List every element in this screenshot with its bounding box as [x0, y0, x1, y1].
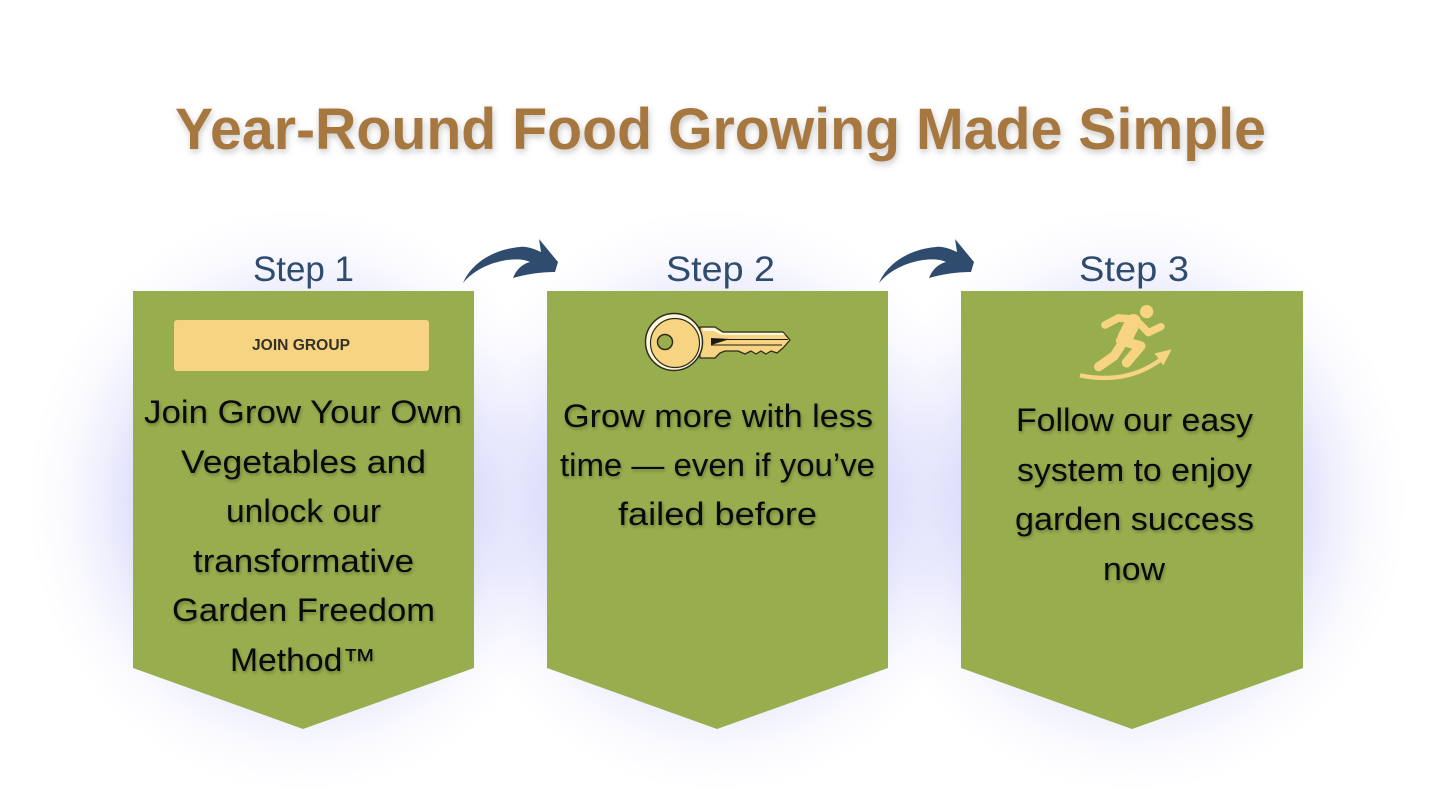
- step 2 description: [560, 398, 875, 532]
- title: Year-Round Food Growing Made Simple: [175, 97, 1266, 162]
- step 2 pentagon background: [547, 291, 888, 729]
- step 3 heading: Step 3: [1079, 250, 1189, 289]
- step 3 description: Follow our easy: [1016, 402, 1253, 438]
- arrow: step 1 to step 2: [463, 239, 558, 283]
- step 1 description: Garden Freedom: [172, 592, 435, 628]
- join group button: [174, 320, 429, 371]
- panel: step 3: [961, 250, 1303, 729]
- step 1 description: Join Grow Your Own: [144, 394, 462, 430]
- step 3 description: [1015, 402, 1254, 587]
- panel: step 1: [133, 250, 474, 729]
- step 3 description: now: [1103, 551, 1166, 587]
- step 3 description: garden success: [1015, 501, 1254, 537]
- step 1 pentagon background: [133, 291, 474, 729]
- arrow: step 2 to step 3: [879, 239, 974, 283]
- background glow behind panels: [28, 208, 1407, 792]
- join group button: JOIN GROUP: [252, 337, 350, 354]
- icon: runner with rising arrow: [1080, 305, 1172, 378]
- step 1 description: [144, 394, 462, 678]
- panel: step 2: [547, 250, 888, 729]
- step 3 pentagon background: [961, 291, 1303, 729]
- step 1 heading: Step 1: [253, 250, 354, 289]
- step 1 description: unlock our: [226, 493, 381, 529]
- step 1 description: Vegetables and: [181, 444, 426, 480]
- step 1 description: Method™: [230, 642, 376, 678]
- step 2 description: Grow more with less: [563, 398, 873, 434]
- step 2 description: time — even if you’ve: [560, 447, 875, 483]
- step 1 description: transformative: [193, 543, 414, 579]
- step 2 description: failed before: [618, 496, 817, 532]
- step 3 description: system to enjoy: [1017, 452, 1252, 488]
- step 2 heading: Step 2: [666, 250, 775, 289]
- icon: key: [646, 314, 790, 370]
